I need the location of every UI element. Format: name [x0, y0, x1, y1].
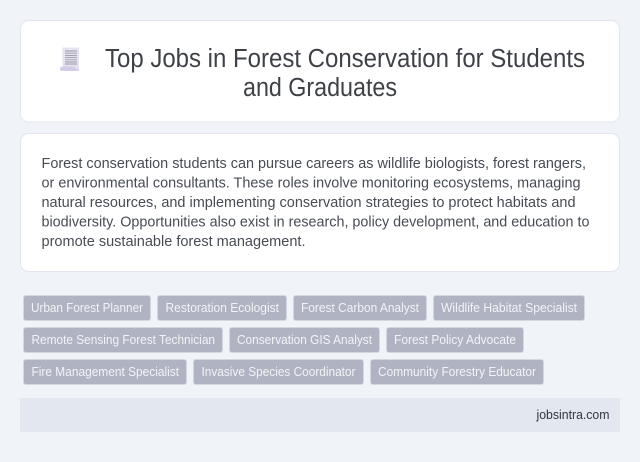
tag: Urban Forest Planner: [24, 296, 150, 320]
icon: document scroll: [60, 48, 79, 71]
tag: Remote Sensing Forest Technician: Remote Sensing Forest Technician: [32, 333, 215, 347]
tag: Invasive Species Coordinator: [194, 360, 364, 384]
tag: Forest Policy Advocate: Forest Policy Advocate: [394, 333, 516, 347]
footer bar: [20, 398, 620, 432]
tag: Forest Policy Advocate: [386, 328, 524, 352]
tag: Urban Forest Planner: Urban Forest Planner: [31, 301, 143, 315]
title: and Graduates: [243, 74, 397, 102]
tag: Restoration Ecologist: [158, 296, 286, 320]
tag: Fire Management Specialist: Fire Management Specialist: [32, 365, 179, 379]
tag: Wildlife Habitat Specialist: [434, 296, 584, 320]
title: [105, 45, 585, 102]
tag: Conservation GIS Analyst: [230, 328, 380, 352]
tag: Fire Management Specialist: [24, 360, 186, 384]
tag list: job titles: [24, 296, 584, 384]
tag: Conservation GIS Analyst: Conservation GIS Analyst: [237, 333, 372, 347]
text block: summary paragraph: Forest conservation students can pursue careers as wildlife biologists, forest rangers,: [42, 156, 586, 172]
tag: Remote Sensing Forest Technician: [24, 328, 222, 352]
text block: summary paragraph: or environmental consultants. These roles involve monitoring ecosystems, managing: [42, 176, 580, 192]
text block: summary paragraph: natural resources, and implementing conservation strategies to protect habitats and: [42, 195, 576, 211]
footer text: site name: jobsintra.com: [536, 408, 610, 422]
title: Top Jobs in Forest Conservation for Students: [105, 45, 585, 73]
tag: Restoration Ecologist: Restoration Ecologist: [166, 301, 279, 315]
panel: title card: [20, 20, 620, 122]
tag: Forest Carbon Analyst: [294, 296, 426, 320]
text block: summary paragraph: promote sustainable forest management.: [42, 234, 306, 250]
text block: summary paragraph: biodiversity. Opportunities also exist in research, policy development, and education to: [42, 214, 590, 230]
tag: Community Forestry Educator: Community Forestry Educator: [378, 365, 536, 379]
tag: Wildlife Habitat Specialist: Wildlife Habitat Specialist: [441, 301, 577, 315]
tag: Forest Carbon Analyst: Forest Carbon Analyst: [301, 301, 419, 315]
panel: summary card: [20, 134, 620, 272]
tag: Community Forestry Educator: [370, 360, 544, 384]
tag: Invasive Species Coordinator: Invasive Species Coordinator: [202, 365, 356, 379]
text block: summary paragraph: [42, 156, 590, 250]
